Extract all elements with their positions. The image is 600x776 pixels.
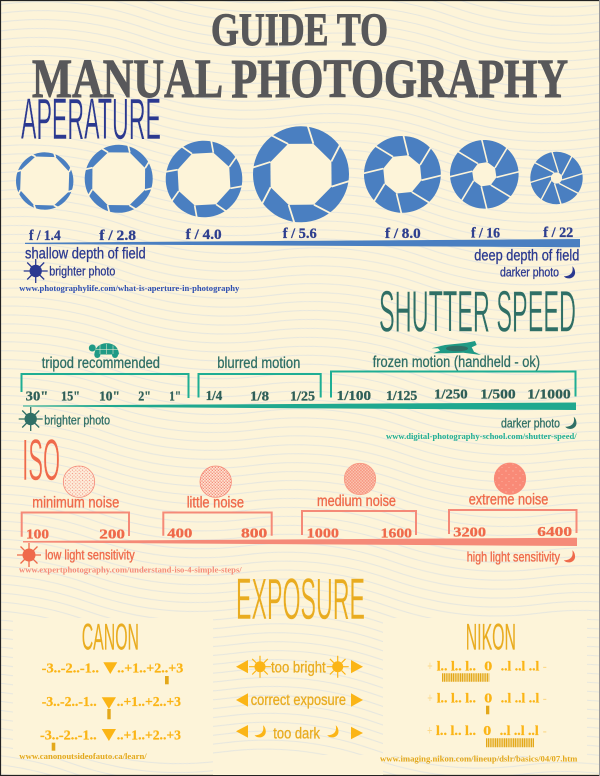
text: ISO — [22, 428, 60, 493]
ISO values: 200 — [99, 527, 125, 542]
shutter speed values: 1/125 — [386, 389, 417, 404]
icon: turtle — [89, 343, 119, 358]
nikon meter: correct: - — [543, 692, 547, 707]
shutter speed values: 30" — [26, 390, 48, 405]
shutter group labels: frozen motion (handheld - ok) — [373, 354, 540, 371]
icon: cheetah — [432, 341, 481, 355]
aperture icon f/4.0 — [153, 128, 255, 230]
shutter group labels: tripod recommended — [42, 355, 160, 372]
canon meter: underexposed: ..+1..+2..+3 — [117, 728, 181, 743]
aperture icon f/8.0 — [354, 126, 451, 223]
icon: sun ISO — [17, 543, 41, 567]
ISO values — [26, 525, 572, 542]
nikon meter: underexposed: - — [543, 724, 547, 739]
ISO values: 800 — [241, 527, 267, 542]
exposure legend: correct exposure: correct exposure — [251, 692, 346, 709]
nikon meter: overexposed: + — [427, 660, 433, 675]
panel: nikon: NIKON — [466, 616, 516, 657]
ISO group labels: medium noise — [317, 493, 396, 510]
nikon meter: correct: ..l ..l ..l — [501, 692, 539, 707]
ISO values: 6400 — [537, 525, 572, 540]
shutter speed values: 1/100 — [337, 389, 371, 404]
aperture icon f/2.8 — [72, 133, 165, 225]
ISO link: www.expertphotography.com/understand-iso-4-simple-steps/ — [19, 564, 242, 574]
ISO group labels: little noise — [187, 495, 244, 512]
aperture icon f/22 — [523, 144, 590, 212]
footer strip under legend — [213, 755, 383, 775]
nikon meter: underexposed: ..l ..l ..l — [500, 724, 539, 739]
shutter link: www.digital-photography-school.com/shutter-speed/ — [386, 431, 577, 441]
text: EXPOSURE — [236, 567, 365, 632]
canon meter: overexposed: ..+1..+2..+3 — [117, 662, 183, 677]
ISO group labels: extreme noise — [469, 491, 548, 508]
aperture f-stop labels: f / 8.0 — [385, 226, 421, 242]
shutter caption: brighter photo: brighter photo — [44, 412, 110, 427]
icon: moon aperture — [564, 266, 575, 278]
icon: moon shutter — [565, 417, 576, 429]
aperture caption: shallow depth of field: shallow depth of field — [25, 245, 146, 262]
shutter speed values: 1/4 — [206, 389, 222, 404]
shutter speed values: 10" — [99, 390, 120, 405]
nikon meter: correct: + — [427, 692, 433, 707]
canon link: www.canonoutsideofauto.ca/learn/ — [19, 751, 147, 761]
ISO values: 1000 — [307, 526, 339, 541]
ISO group labels — [32, 491, 548, 512]
shutter group labels: blurred motion — [217, 355, 300, 372]
shutter speed values: 1/1000 — [527, 388, 571, 403]
ISO values: 100 — [26, 527, 49, 542]
icon: moon ISO — [564, 550, 575, 562]
noise swatches — [63, 463, 526, 497]
aperture icon f/1.4 — [5, 141, 84, 221]
nikon meter: overexposed — [427, 660, 547, 678]
nikon meter: correct: 0 — [484, 692, 492, 707]
panel: canon — [13, 616, 213, 756]
nikon meter: underexposed: l.. l.. l.. — [436, 724, 476, 739]
aperture f-stop labels: f / 1.4 — [29, 228, 61, 244]
ISO caption: low light sensitivity: low light sensitivity — [45, 547, 135, 562]
aperture caption: brighter photo: brighter photo — [49, 264, 115, 279]
shutter scale bar — [23, 402, 576, 410]
ISO brackets — [22, 510, 576, 537]
nikon meter: overexposed: 0 — [484, 660, 492, 675]
nikon meter: correct — [427, 692, 547, 714]
ISO group labels: minimum noise — [32, 495, 119, 512]
icon: sun shutter — [19, 407, 43, 431]
canon meter: correct — [42, 695, 181, 719]
text: APERATURE — [21, 87, 161, 152]
shutter group labels — [42, 354, 540, 372]
aperture link: www.photographylife.com/what-is-aperture-in-photography — [19, 283, 240, 293]
aperture f-stop labels: f / 5.6 — [283, 226, 317, 242]
nikon meter: overexposed: l.. l.. l.. — [437, 660, 476, 675]
shutter caption: darker photo: darker photo — [501, 415, 560, 430]
nikon meter: underexposed: 0 — [483, 724, 491, 739]
canon meter: overexposed: -3..-2..-1.. — [42, 662, 99, 677]
aperture f-stop labels: f / 22 — [543, 225, 573, 241]
shutter speed values: 15" — [61, 390, 80, 405]
shutter brackets — [22, 372, 576, 398]
shutter speed values: 2" — [138, 390, 151, 405]
aperture caption: darker photo: darker photo — [500, 265, 559, 280]
title: GUIDE TO — [211, 4, 388, 56]
ISO scale bar — [23, 538, 577, 546]
exposure legend: too bright: too bright — [271, 660, 326, 677]
ISO values: 1600 — [381, 526, 412, 541]
shutter speed values: 1/500 — [480, 388, 516, 403]
nikon meter: overexposed: - — [543, 660, 547, 675]
exposure legend: too bright — [236, 656, 363, 678]
shutter speed values: 1/8 — [250, 390, 269, 405]
shutter speed values — [26, 388, 571, 405]
nikon meter: overexposed: ..l ..l ..l — [501, 660, 539, 675]
shutter speed values: 1/250 — [434, 388, 468, 403]
shutter speed values: 1" — [169, 390, 181, 405]
canon meter: underexposed: -3..-2..-1.. — [40, 728, 97, 743]
exposure legend: too dark: too dark — [273, 725, 320, 742]
exposure legend: too dark — [236, 725, 363, 742]
aperture f-stop labels — [29, 225, 573, 244]
aperture f-stop labels: f / 16 — [471, 225, 500, 241]
canon meter: underexposed — [40, 728, 181, 751]
canon meter: overexposed — [42, 662, 183, 684]
icon: sun aperture — [24, 259, 48, 283]
aperture f-stop labels: f / 2.8 — [99, 228, 136, 244]
aperture icon f/16 — [441, 131, 528, 218]
nikon meter: underexposed: + — [427, 724, 432, 739]
title — [32, 4, 568, 109]
shutter speed values: 1/25 — [290, 390, 315, 405]
aperture f-stop labels: f / 4.0 — [186, 227, 222, 243]
aperture scale bar — [25, 239, 580, 247]
ISO caption: high light sensitivity: high light sensitivity — [467, 550, 560, 565]
nikon link: www.imaging.nikon.com/lineup/dslr/basics/04/07.htm — [380, 754, 577, 764]
canon meter: correct: -3..-2..-1.. — [42, 695, 97, 710]
panel: canon: CANON — [82, 616, 139, 657]
panel: nikon — [383, 616, 587, 756]
canon meter: correct: ..+1..+2..+3 — [117, 695, 181, 710]
ISO values: 400 — [167, 527, 192, 542]
nikon meter: correct: l.. l.. l.. — [437, 692, 476, 707]
ISO values: 3200 — [453, 526, 486, 541]
aperture icon f/5.6 — [238, 111, 364, 238]
nikon meter: underexposed — [427, 724, 547, 743]
